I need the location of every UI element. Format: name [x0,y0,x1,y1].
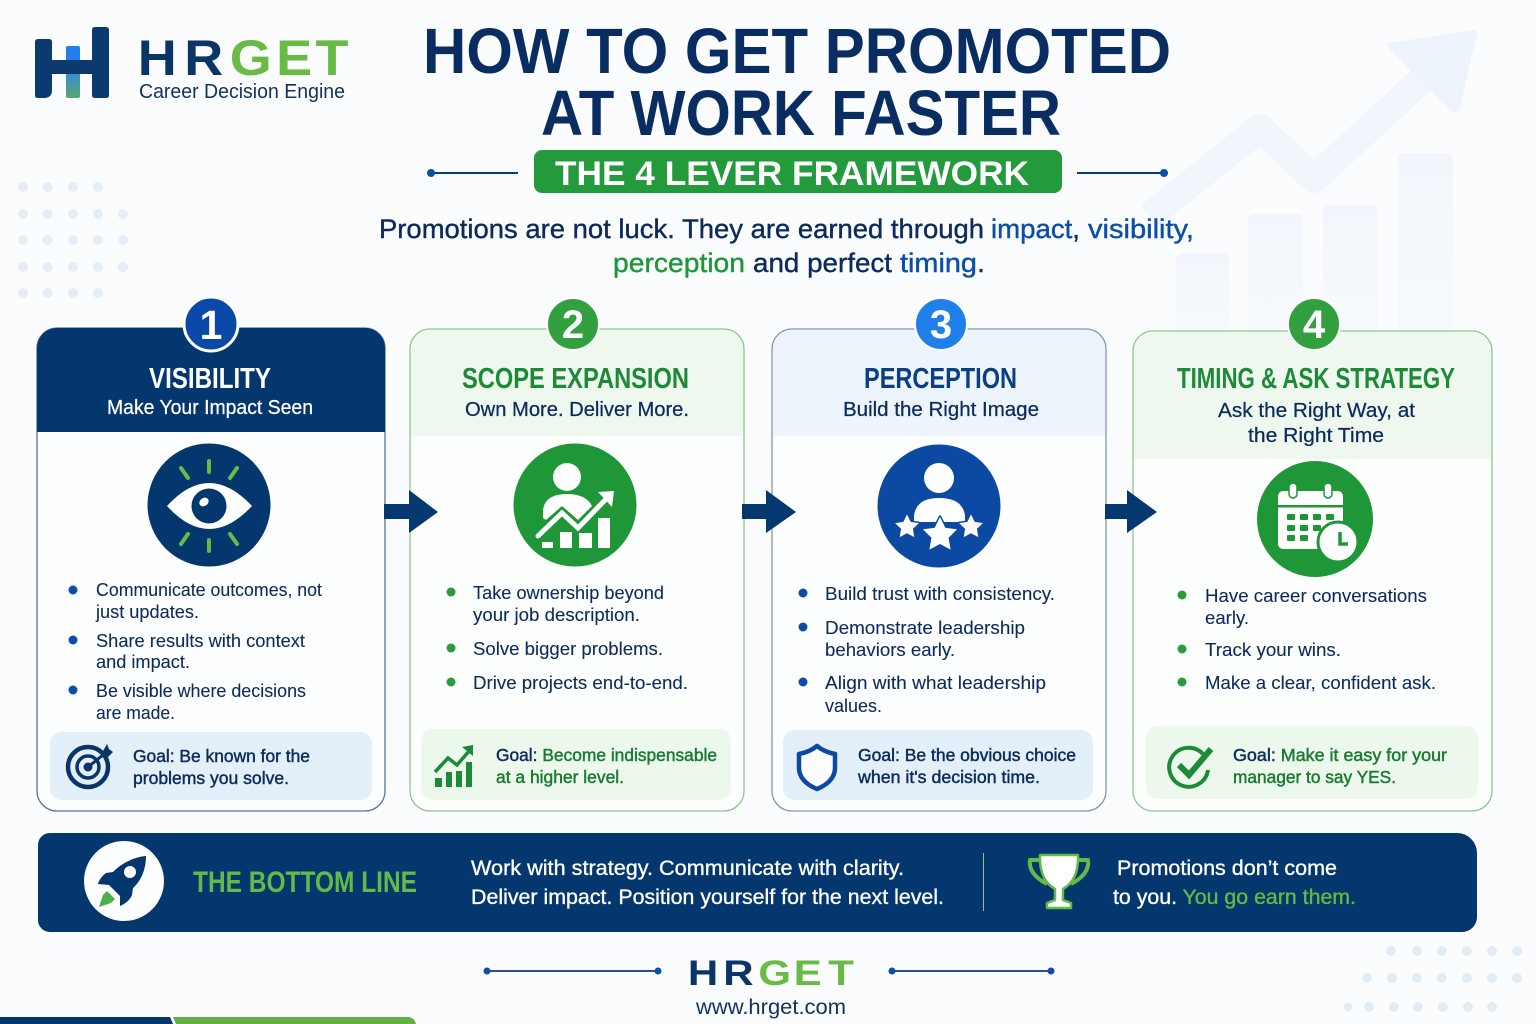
goal box: Goal: Become indispensable [496,745,717,765]
icon: rocket [84,841,164,921]
bullet list: Align with what leadership [825,673,1046,693]
bottom colour strip [0,1017,416,1024]
arrow 3 to 4 [1105,490,1157,533]
arrow 1 to 2 [384,490,438,533]
number badge 2: 2 [562,303,584,347]
panel: timing and ask strategy [1133,298,1492,811]
subheading: Ask the Right Way, at [1218,400,1415,422]
card header [37,328,385,432]
number badge 2 [547,298,599,350]
dots top left [18,182,128,298]
heading: SCOPE EXPANSION [462,363,689,395]
icon: check circle [1169,748,1211,787]
bullet list: just updates. [95,602,199,622]
goal box: problems you solve. [133,768,289,788]
bullet list: Make a clear, confident ask. [1205,673,1436,693]
number badge 4 [1288,298,1340,350]
icon: person with growth chart [514,444,636,566]
heading: THE BOTTOM LINE [193,866,417,899]
icon: calendar with clock [1257,461,1373,577]
panel: scope expansion [410,298,744,811]
arrow 2 to 3 [742,490,796,533]
dots bottom right [1344,946,1522,1012]
card header [773,330,1105,436]
intro text: perception [613,248,745,278]
card header [411,330,743,436]
summary text [471,857,944,909]
goal box: manager to say YES. [1233,767,1396,787]
subheading: Own More. Deliver More. [465,399,689,421]
intro text: visibility, [1088,214,1194,244]
bullet list: early. [1205,608,1249,628]
number badge 1 [184,297,238,351]
footer logo: GET [758,954,854,993]
goal box [1146,726,1478,799]
goal box: Goal: Make it easy for your [1233,745,1447,765]
title [423,15,1171,149]
summary text: Deliver impact. Position yourself for the next level. [471,886,944,909]
bullet list: Demonstrate leadership [825,618,1025,638]
icon: growth chart [435,745,473,787]
number badge 3 [915,298,967,350]
bullet list: are made. [96,703,175,723]
footer line right [888,968,1054,974]
goal box [50,732,372,800]
icon: target [68,744,113,787]
intro text [379,214,1194,278]
goal box: at a higher level. [496,767,624,787]
bullet list: Track your wins. [1205,640,1341,660]
closing text: to you. You go earn them. [1113,886,1356,909]
footer logo: HR [688,954,754,993]
footer url: www.hrget.com [695,996,846,1019]
heading: VISIBILITY [149,363,271,395]
title: HOW TO GET PROMOTED [423,15,1171,87]
bullet list: Solve bigger problems. [473,639,663,659]
intro text: timing. [900,248,985,278]
title: AT WORK FASTER [541,77,1061,149]
subtitle pill: the 4 lever framework: THE 4 LEVER FRAMEWORK [555,155,1029,193]
decorative line left [427,169,518,177]
footer line left [484,968,662,974]
bullet list: Be visible where decisions [96,681,306,701]
bullet list: Take ownership beyond [473,583,664,603]
card body [37,328,385,811]
intro text: and perfect [753,248,893,278]
bullet list [798,584,1055,716]
subheading: the Right Time [1248,425,1384,447]
bullet list: Share results with context [96,631,305,651]
panel: perception [772,298,1106,811]
panel: the bottom line [38,833,1477,932]
logo wordmark: GET [230,31,349,87]
logo wordmark: HR [138,31,223,87]
bullet list: your job description. [473,605,640,625]
number badge 1: 1 [200,302,222,348]
icon: person with stars [878,444,1000,568]
bullet list [446,583,688,693]
decorative line right [1077,169,1168,177]
icon: eye [148,444,270,566]
bullet list: values. [825,696,882,716]
bullet list: Have career conversations [1205,586,1427,606]
background growth chart [1150,30,1477,345]
icon: shield [799,746,835,789]
number badge 4: 4 [1303,303,1326,347]
bullet list: and impact. [96,652,190,672]
bullet list: behaviors early. [825,640,955,660]
subheading: Make Your Impact Seen [107,397,313,419]
heading: PERCEPTION [864,363,1017,395]
number badge 3: 3 [930,303,952,347]
divider [982,853,984,911]
closing text: Promotions don’t come [1117,857,1337,880]
card header [1134,332,1491,459]
bullet list [68,580,322,723]
icon: trophy [1030,855,1088,908]
subheading: Build the Right Image [843,399,1039,421]
card body [772,329,1106,811]
subheading [1218,400,1415,447]
closing text [1113,857,1356,909]
panel: visibility [37,297,385,811]
summary text: Work with strategy. Communicate with clarity. [471,857,904,880]
intro text: Promotions are not luck. They are earned through [379,214,984,244]
logo mark [35,27,109,98]
goal box [421,729,731,800]
bullet list: Communicate outcomes, not [96,580,322,600]
intro text: impact, [991,214,1080,244]
card body [1133,331,1492,811]
heading: TIMING & ASK STRATEGY [1177,363,1455,395]
card body [410,329,744,811]
bullet list: Drive projects end-to-end. [473,673,688,693]
goal box: Goal: Be known for the [133,746,310,766]
goal box: when it's decision time. [857,767,1040,787]
bullet list: Build trust with consistency. [825,584,1055,604]
bullet list [1178,586,1436,693]
goal box [783,730,1093,800]
goal box: Goal: Be the obvious choice [858,745,1076,765]
logo tagline: Career Decision Engine [139,81,345,103]
logo [35,27,349,103]
